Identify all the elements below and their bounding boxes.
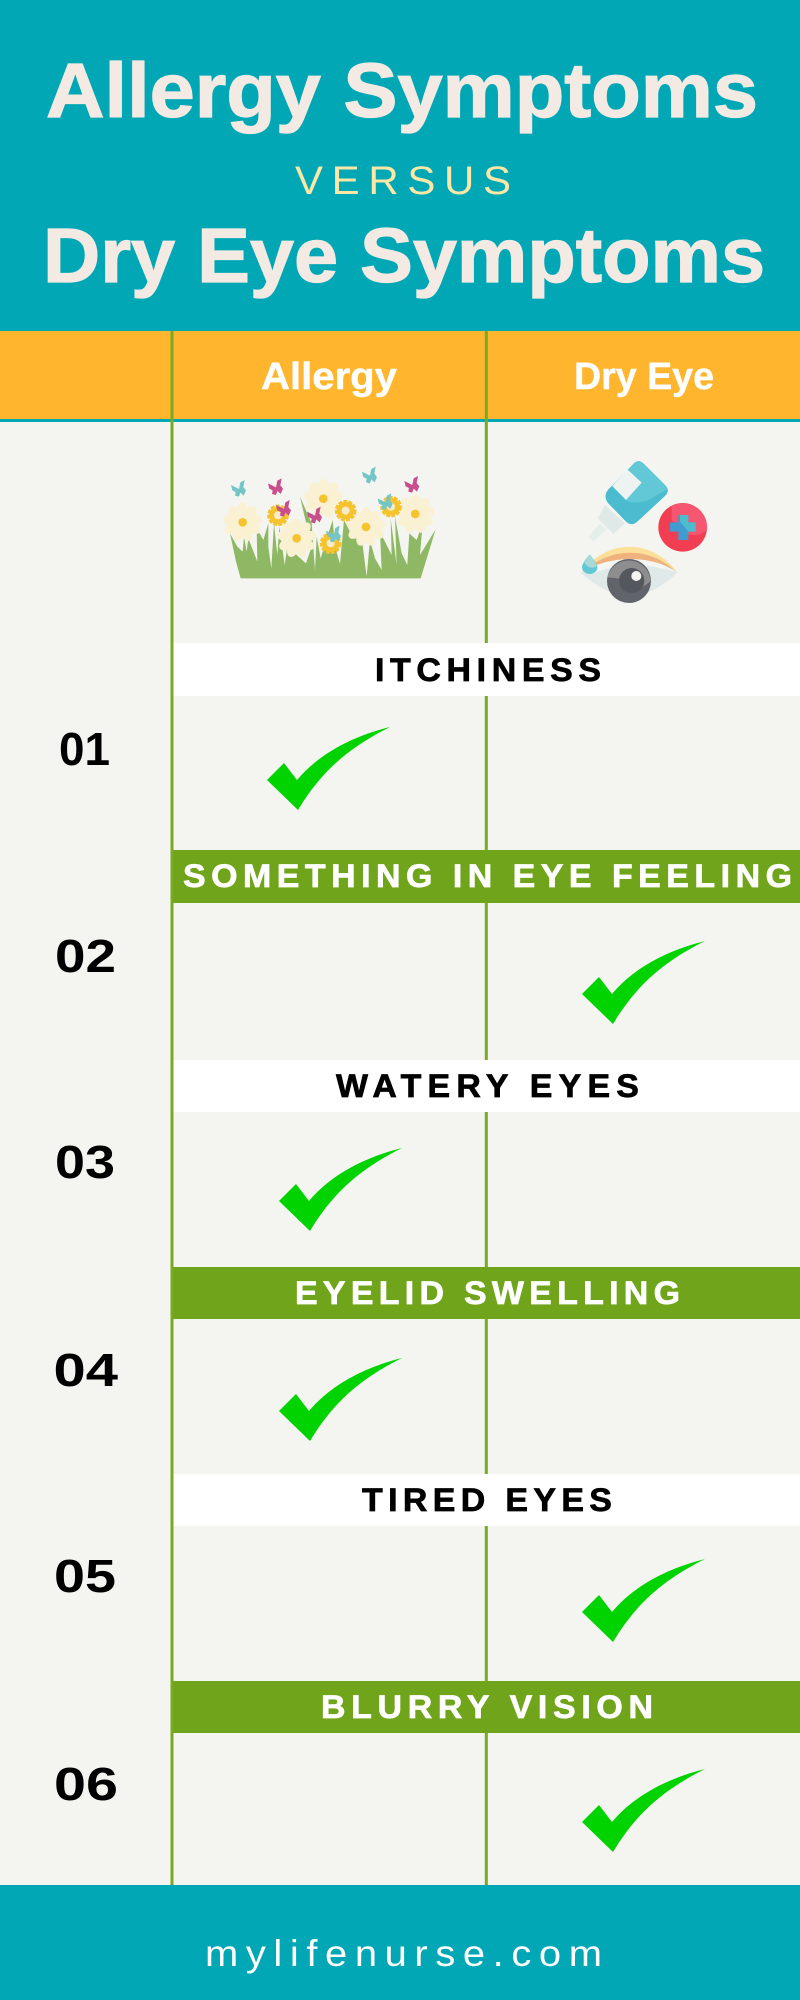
- title: Allergy Symptoms: Allergy Symptoms: [46, 48, 758, 134]
- column heading: Allergy: Allergy: [261, 356, 397, 398]
- check: allergy watery eyes: [279, 1148, 402, 1231]
- symptom band: tired eyes: TIRED EYES: [362, 1482, 612, 1518]
- footer: [0, 1885, 800, 2000]
- icon: flowers and butterflies: [222, 467, 436, 578]
- check: dry eye something in eye: [582, 941, 705, 1024]
- check: allergy eyelid swelling: [279, 1358, 402, 1441]
- symptom band: watery eyes: WATERY EYES: [336, 1068, 639, 1104]
- row number 03: 03: [55, 1136, 115, 1188]
- symptom band: something in eye feeling: [174, 850, 800, 903]
- row number 05: 05: [54, 1550, 116, 1602]
- title: Dry Eye Symptoms: Dry Eye Symptoms: [43, 213, 765, 299]
- check: allergy itchiness: [267, 727, 390, 810]
- table header row: [0, 331, 800, 422]
- symptom band: something in eye feeling: SOMETHING IN EYE FEELING: [183, 858, 792, 894]
- row number 02: 02: [55, 930, 116, 982]
- column heading: Dry Eye: Dry Eye: [574, 356, 714, 398]
- footer: mylifenurse.com: [205, 1933, 602, 1975]
- symptom band: eyelid swelling: [174, 1267, 800, 1319]
- symptom band: blurry vision: [174, 1681, 800, 1733]
- row number 06: 06: [54, 1758, 118, 1810]
- symptom band: blurry vision: BLURRY VISION: [321, 1689, 653, 1725]
- check: dry eye blurry vision: [582, 1769, 705, 1852]
- symptom band: watery eyes: [174, 1060, 800, 1112]
- header banner: [0, 0, 800, 331]
- symptom band: itchiness: ITCHINESS: [375, 652, 601, 688]
- subtitle: versus: VERSUS: [295, 158, 511, 203]
- symptom band: itchiness: [174, 643, 800, 696]
- check: dry eye tired eyes: [582, 1559, 705, 1642]
- row number 04: 04: [54, 1344, 119, 1396]
- symptom band: eyelid swelling: EYELID SWELLING: [295, 1275, 680, 1311]
- icon: eye drops and eye: [581, 461, 707, 603]
- symptom band: tired eyes: [174, 1474, 800, 1526]
- row number 01: 01: [59, 723, 110, 775]
